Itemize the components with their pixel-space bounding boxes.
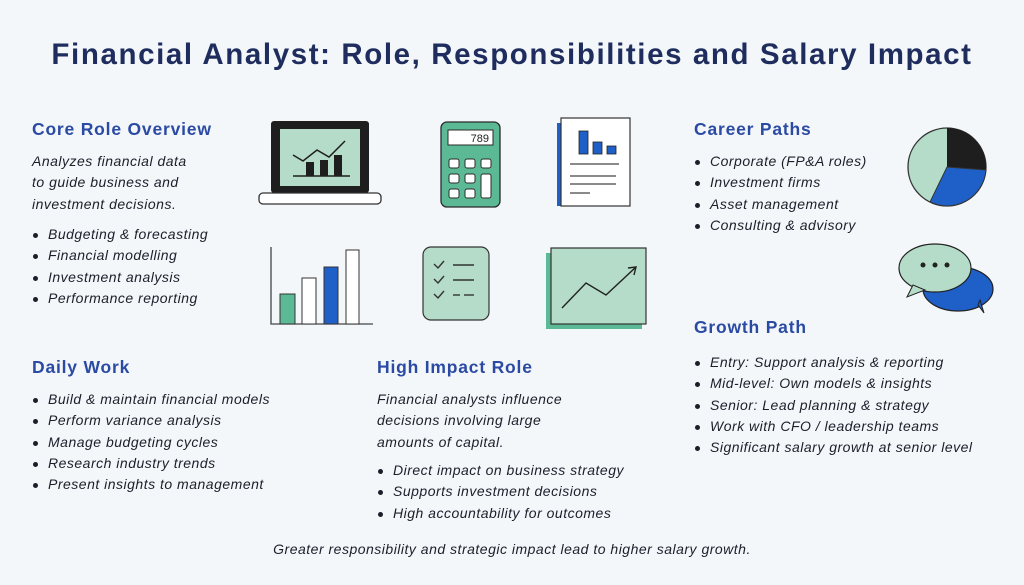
list: growth path: Entry: Support analysis & reporting: [710, 354, 944, 370]
icon: report document: [557, 118, 630, 206]
text: core role: Analyzes financial data: [32, 153, 187, 169]
list: growth path: [695, 354, 973, 455]
icon: checklist: [423, 247, 489, 320]
list: core role bullets: Financial modelling: [48, 247, 177, 263]
heading: career paths: Career Paths: [694, 119, 812, 139]
icon: bar chart: [271, 247, 373, 324]
list: daily work: Manage budgeting cycles: [48, 434, 218, 450]
icon: pie chart: [908, 128, 986, 206]
list: core role bullets: Performance reporting: [48, 290, 198, 306]
list: career paths: Asset management: [710, 196, 839, 212]
text: high impact: [377, 391, 562, 450]
list: career paths: [695, 153, 867, 233]
list: high impact bullets: Supports investment decisions: [393, 483, 597, 499]
list: daily work: Present insights to management: [48, 476, 264, 492]
icon: calculator: 789: [471, 133, 489, 145]
list: high impact bullets: High accountability for outcomes: [393, 505, 611, 521]
icon: speech bubbles: [899, 244, 993, 313]
list: career paths: Consulting & advisory: [710, 217, 856, 233]
footer note: Greater responsibility and strategic impact lead to higher salary growth.: [273, 541, 751, 557]
list: core role bullets: Investment analysis: [48, 269, 180, 285]
list: daily work: Build & maintain financial models: [48, 391, 270, 407]
text: high impact: amounts of capital.: [377, 434, 504, 450]
list: high impact bullets: [378, 462, 624, 521]
text: high impact: Financial analysts influence: [377, 391, 562, 407]
heading: daily work: Daily Work: [32, 357, 130, 377]
heading: core role overview: Core Role Overview: [32, 119, 212, 139]
text: core role: to guide business and: [32, 174, 179, 190]
list: career paths: Corporate (FP&A roles): [710, 153, 867, 169]
icon: line chart panel: [546, 248, 646, 329]
list: growth path: Significant salary growth at senior level: [710, 439, 973, 455]
list: core role bullets: [33, 226, 208, 306]
list: growth path: Work with CFO / leadership teams: [710, 418, 939, 434]
text: high impact: decisions involving large: [377, 412, 541, 428]
title: Financial Analyst: Role, Responsibilities and Salary Impact: [51, 38, 973, 71]
list: growth path: Mid-level: Own models & insights: [710, 375, 932, 391]
list: daily work: Research industry trends: [48, 455, 216, 471]
list: daily work: [33, 391, 270, 492]
heading: growth path: Growth Path: [694, 317, 807, 337]
icon: laptop: [259, 121, 381, 204]
heading: high impact role: High Impact Role: [377, 357, 533, 377]
icon: calculator: [441, 122, 500, 207]
list: core role bullets: Budgeting & forecasting: [48, 226, 208, 242]
text: core role: [31, 153, 187, 212]
list: growth path: Senior: Lead planning & strategy: [710, 397, 929, 413]
text: core role: investment decisions.: [32, 196, 176, 212]
list: daily work: Perform variance analysis: [48, 412, 222, 428]
list: career paths: Investment firms: [710, 174, 821, 190]
list: high impact bullets: Direct impact on business strategy: [393, 462, 624, 478]
